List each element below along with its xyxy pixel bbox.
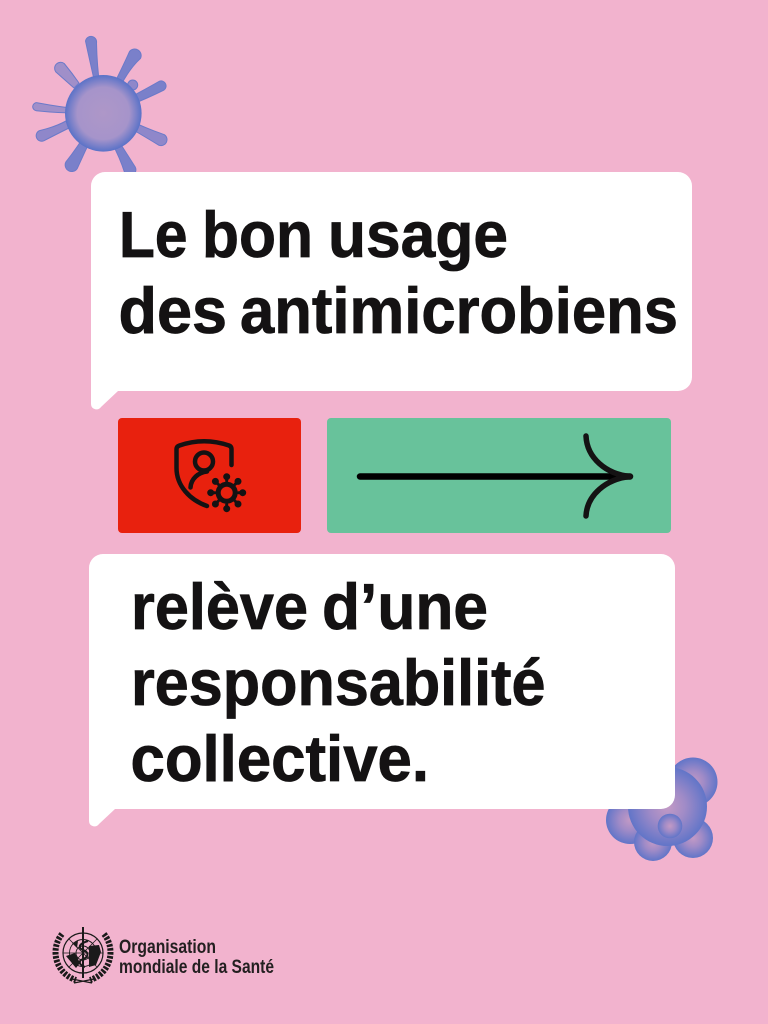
- panel: red icon tile: [118, 418, 301, 533]
- icon: virus: [33, 36, 167, 176]
- text: organisation name: Organisation: [119, 936, 216, 958]
- heading: top text: Le: [119, 198, 188, 271]
- text: bottom message: relève: [131, 570, 308, 643]
- text: bottom message: responsabilité: [131, 646, 546, 719]
- icon: bacteria cluster: [606, 758, 718, 861]
- panel: top speech bubble: [91, 172, 692, 409]
- arrow: [360, 436, 630, 516]
- panel: green arrow tile: [327, 418, 671, 533]
- heading: top text: antimicrobiens: [240, 274, 678, 347]
- heading: top text: usage: [328, 198, 508, 271]
- heading: top text: bon: [202, 198, 313, 271]
- panel: bottom speech bubble: [89, 554, 675, 826]
- text: bottom message: collective.: [130, 722, 429, 795]
- text: organisation name: mondiale de la Santé: [119, 956, 274, 978]
- icon: shield with person and virus: [176, 441, 243, 509]
- text: bottom message: d’une: [322, 570, 488, 643]
- heading: top text: des: [118, 274, 227, 347]
- logo: Organisation mondiale de la Santé: [56, 927, 274, 983]
- icon: WHO emblem: [56, 927, 110, 983]
